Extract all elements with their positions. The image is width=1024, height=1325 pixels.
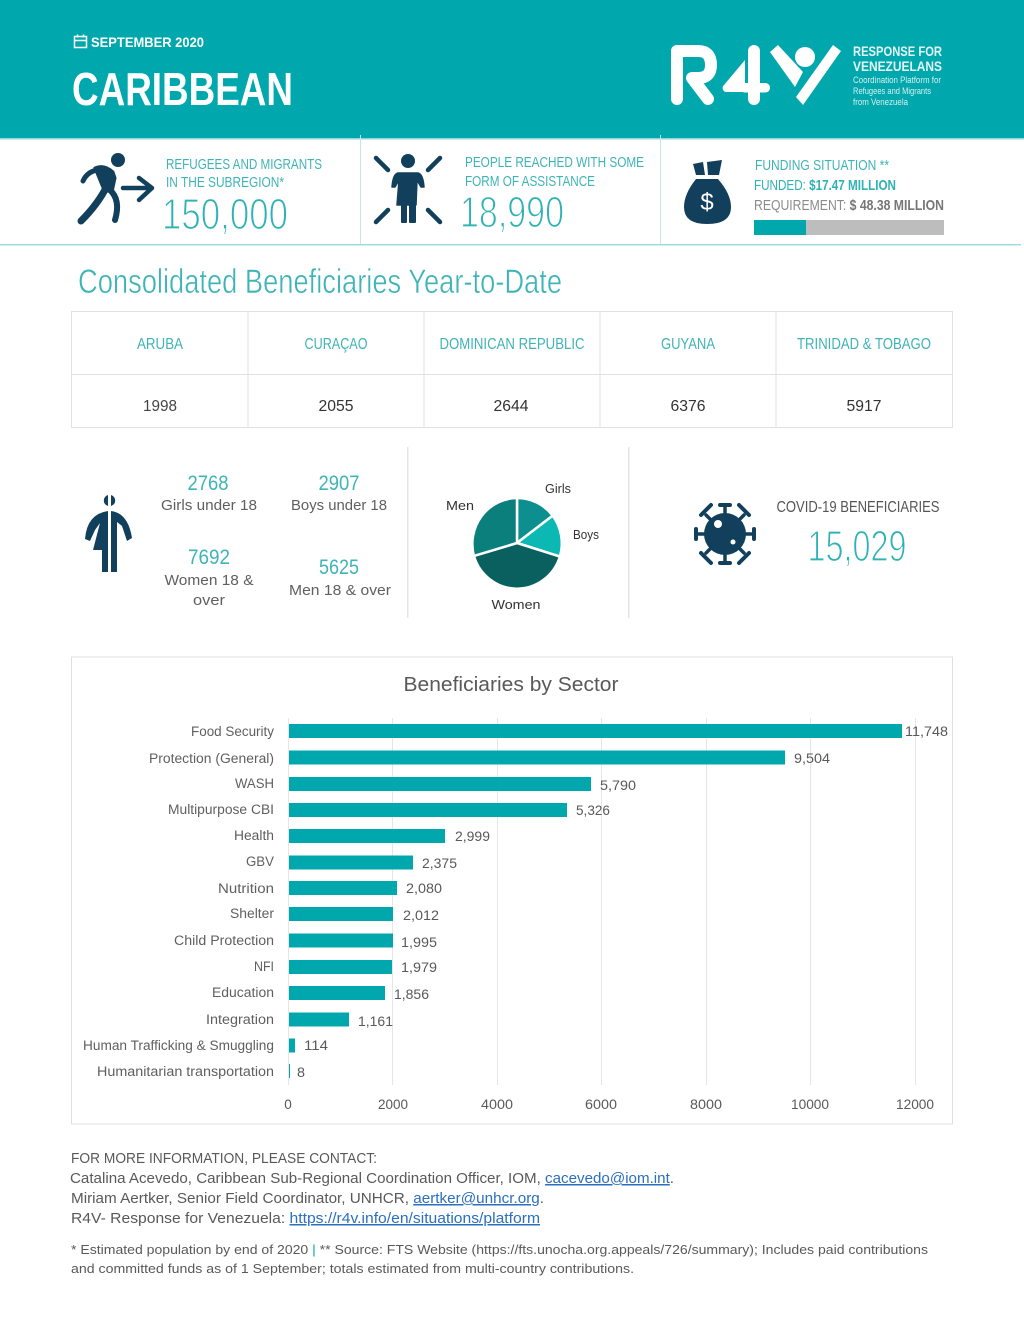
value labels: 2,012	[403, 908, 439, 923]
panel: funding situation: REQUIREMENT: $ 48.38 MILLION	[754, 197, 944, 214]
table: beneficiaries by country: 6376	[670, 398, 706, 415]
panel: funding situation	[684, 157, 944, 235]
table: beneficiaries by country: CURAÇAO	[304, 336, 368, 353]
value labels	[297, 724, 948, 1080]
stat: boys: 2907	[318, 472, 360, 495]
stat: women: 7692	[188, 546, 230, 569]
table: beneficiaries by country: 1998	[143, 398, 177, 415]
value labels: 114	[304, 1038, 329, 1053]
label: REFUGEES AND MIGRANTS	[166, 156, 322, 173]
icon: calendar	[74, 34, 86, 48]
label: COVID-19 BENEFICIARIES	[776, 499, 940, 516]
pie chart: gender and age: Men	[446, 498, 474, 513]
KPI strip dividers	[0, 135, 1021, 246]
category labels: Humanitarian transportation	[97, 1064, 274, 1079]
category labels: Education	[212, 985, 274, 1000]
table: beneficiaries by country: 5917	[846, 398, 882, 415]
value labels: 5,326	[576, 803, 610, 818]
dividers for demographic row	[407, 447, 630, 618]
logo text: RESPONSE FOR	[853, 43, 942, 59]
pie chart: gender and age	[446, 481, 599, 612]
category labels: Child Protection	[174, 933, 274, 948]
chart title: Beneficiaries by Sector	[404, 674, 619, 696]
title: CARIBBEAN	[72, 63, 293, 115]
contact information: FOR MORE INFORMATION, PLEASE CONTACT:	[71, 1150, 377, 1167]
category labels: Nutrition	[218, 881, 274, 896]
panel: demographics: Girls under 18	[161, 498, 257, 514]
table: beneficiaries by country: GUYANA	[661, 336, 715, 353]
table: beneficiaries by country: DOMINICAN REPUBLIC	[440, 336, 584, 353]
value labels: 2,375	[422, 856, 457, 871]
icon: person with rays	[376, 154, 440, 222]
value labels: 2,080	[406, 881, 442, 896]
header band	[0, 0, 1024, 140]
value labels: 9,504	[794, 751, 831, 766]
panel: demographics: Boys under 18	[291, 498, 387, 514]
table: beneficiaries by country: 2055	[318, 398, 354, 415]
category labels: Integration	[206, 1012, 274, 1027]
x axis labels: 4000	[481, 1097, 513, 1112]
panel: demographics: over	[193, 593, 225, 609]
footnote: * Estimated population by end of 2020 | ** Source: FTS Website (https://fts.unocha.org.appeals/726/summary); Includes paid contributions	[71, 1243, 928, 1257]
panel: refugees and migrants	[81, 153, 322, 239]
heading: consolidated beneficiaries: Consolidated Beneficiaries Year-to-Date	[78, 263, 562, 301]
footnote	[71, 1243, 928, 1276]
category labels: GBV	[246, 854, 274, 869]
category labels	[83, 724, 275, 1079]
x axis labels: 10000	[791, 1097, 829, 1112]
panel: people reached: FORM OF ASSISTANCE	[465, 173, 595, 190]
category labels: NFI	[254, 959, 274, 974]
x axis labels: 2000	[378, 1097, 408, 1112]
table: beneficiaries by country: 2644	[494, 398, 529, 415]
table: beneficiaries by country: TRINIDAD & TOBAGO	[797, 336, 931, 353]
value labels: 1,856	[394, 987, 429, 1002]
footnote: and committed funds as of 1 September; totals estimated from multi-country contributions.	[71, 1262, 634, 1276]
panel: demographics: Men 18 & over	[289, 583, 391, 599]
icon: running person with arrow	[81, 153, 152, 221]
table: beneficiaries by country: ARUBA	[137, 336, 183, 353]
panel: people reached	[376, 154, 644, 237]
bars	[289, 724, 902, 1078]
stat: men: 5625	[319, 556, 359, 579]
date: SEPTEMBER 2020	[91, 34, 204, 50]
panel: covid-19 beneficiaries	[696, 499, 940, 571]
panel: demographics: Women 18 &	[164, 573, 254, 589]
value labels: 11,748	[905, 724, 948, 739]
table: beneficiaries by country	[71, 312, 953, 428]
label: PEOPLE REACHED WITH SOME	[465, 154, 644, 171]
funding progress bar	[754, 220, 944, 235]
category labels: Shelter	[230, 906, 275, 921]
panel: demographics	[85, 472, 391, 609]
value: 150,000	[162, 190, 288, 239]
icon: money bag	[684, 160, 731, 224]
x axis labels: 0	[284, 1097, 292, 1112]
category labels: Multipurpose CBI	[168, 802, 274, 817]
logo: R4V: Refugees and Migrants	[853, 86, 931, 96]
x axis labels: 12000	[896, 1097, 934, 1112]
logo: R4V: from Venezuela	[853, 97, 908, 107]
logo: R4V	[677, 43, 942, 107]
icon: money bag: $	[700, 189, 714, 216]
panel: funding situation: FUNDED: $17.47 MILLION	[754, 177, 896, 194]
contact information	[70, 1150, 674, 1227]
contact information: R4V- Response for Venezuela: https://r4v.info/en/situations/platform	[71, 1210, 540, 1227]
pie chart: gender and age: Women	[492, 597, 540, 612]
logo: R4V: VENEZUELANS	[853, 58, 942, 74]
stat: girls: 2768	[188, 472, 228, 495]
value labels: 2,999	[455, 829, 490, 844]
category labels: Human Trafficking & Smuggling	[83, 1038, 274, 1053]
value labels: 1,161	[358, 1014, 393, 1029]
x axis labels: 6000	[585, 1097, 617, 1112]
logo: R4V: Coordination Platform for	[853, 75, 941, 85]
pie chart: gender and age: Girls	[545, 481, 571, 496]
value: 18,990	[460, 188, 564, 237]
pie chart: gender and age: Boys	[573, 527, 599, 542]
icon: virus	[696, 505, 754, 563]
category labels: Health	[234, 828, 274, 843]
value labels: 1,979	[401, 960, 437, 975]
value: 15,029	[808, 522, 906, 571]
value labels: 5,790	[600, 778, 636, 793]
bar chart: beneficiaries by sector	[72, 657, 952, 1124]
label: FUNDING SITUATION **	[755, 157, 889, 174]
contact information: Catalina Acevedo, Caribbean Sub-Regional Coordination Officer, IOM, cacevedo@iom.int.	[70, 1170, 674, 1187]
category labels: Food Security	[191, 724, 274, 739]
category labels: Protection (General)	[149, 751, 274, 766]
x axis labels: 8000	[690, 1097, 722, 1112]
value labels: 8	[297, 1065, 305, 1080]
x axis labels	[284, 1097, 934, 1112]
panel: refugees and migrants: IN THE SUBREGION*	[166, 174, 284, 191]
category labels: WASH	[235, 776, 274, 791]
icon: man and woman	[85, 495, 132, 572]
value labels: 1,995	[401, 935, 437, 950]
contact information: Miriam Aertker, Senior Field Coordinator, UNHCR, aertker@unhcr.org.	[71, 1190, 544, 1207]
